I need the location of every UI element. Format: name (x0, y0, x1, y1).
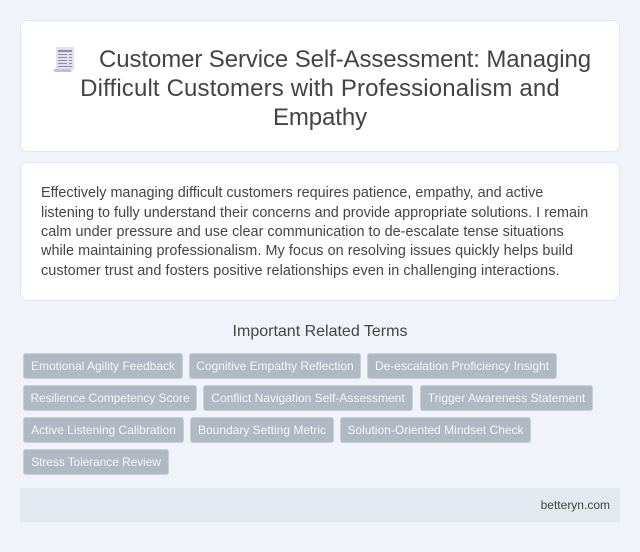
panel: description (20, 162, 620, 301)
tag: Trigger Awareness Statement (428, 391, 585, 405)
description text: while maintaining professionalism. My focus on resolving issues quickly helps build (41, 243, 573, 259)
tag: Stress Tolerance Review (31, 455, 161, 469)
tag (23, 449, 169, 475)
tag (23, 417, 184, 443)
tag: Active Listening Calibration (31, 423, 176, 437)
title: Difficult Customers with Professionalism and (80, 75, 560, 102)
title card (20, 20, 620, 152)
tag: Conflict Navigation Self-Assessment (211, 391, 405, 405)
tag: Solution-Oriented Mindset Check (347, 423, 524, 437)
description text: Effectively managing difficult customers requires patience, empathy, and active (41, 185, 543, 201)
tag: Boundary Setting Metric (198, 423, 326, 437)
tag (23, 385, 197, 411)
tag (189, 353, 361, 379)
tag: Cognitive Empathy Reflection (196, 359, 354, 373)
heading: important related terms: Important Related Terms (233, 323, 407, 340)
tag (367, 353, 557, 379)
tag: Resilience Competency Score (30, 391, 190, 405)
tag (340, 417, 531, 443)
tag: Emotional Agility Feedback (31, 359, 175, 373)
tag (420, 385, 593, 411)
title: Customer Service Self-Assessment: Managing (99, 46, 591, 73)
description text: listening to fully understand their concerns and provide appropriate solutions. I remain (41, 205, 588, 221)
tag: De-escalation Proficiency Insight (375, 359, 549, 373)
tag (23, 353, 183, 379)
icon: paper scroll (54, 47, 74, 72)
description text: calm under pressure and use clear communication to de-escalate tense situations (41, 224, 564, 240)
related terms tags (23, 353, 593, 475)
description text (41, 185, 588, 279)
title: Empathy (273, 104, 367, 131)
description text: customer trust and fosters positive relationships even in challenging interactions. (41, 263, 560, 279)
title (80, 46, 591, 131)
footer brand: betteryn.com (541, 498, 610, 512)
tag (203, 385, 413, 411)
footer bar (20, 488, 620, 522)
tag (190, 417, 334, 443)
